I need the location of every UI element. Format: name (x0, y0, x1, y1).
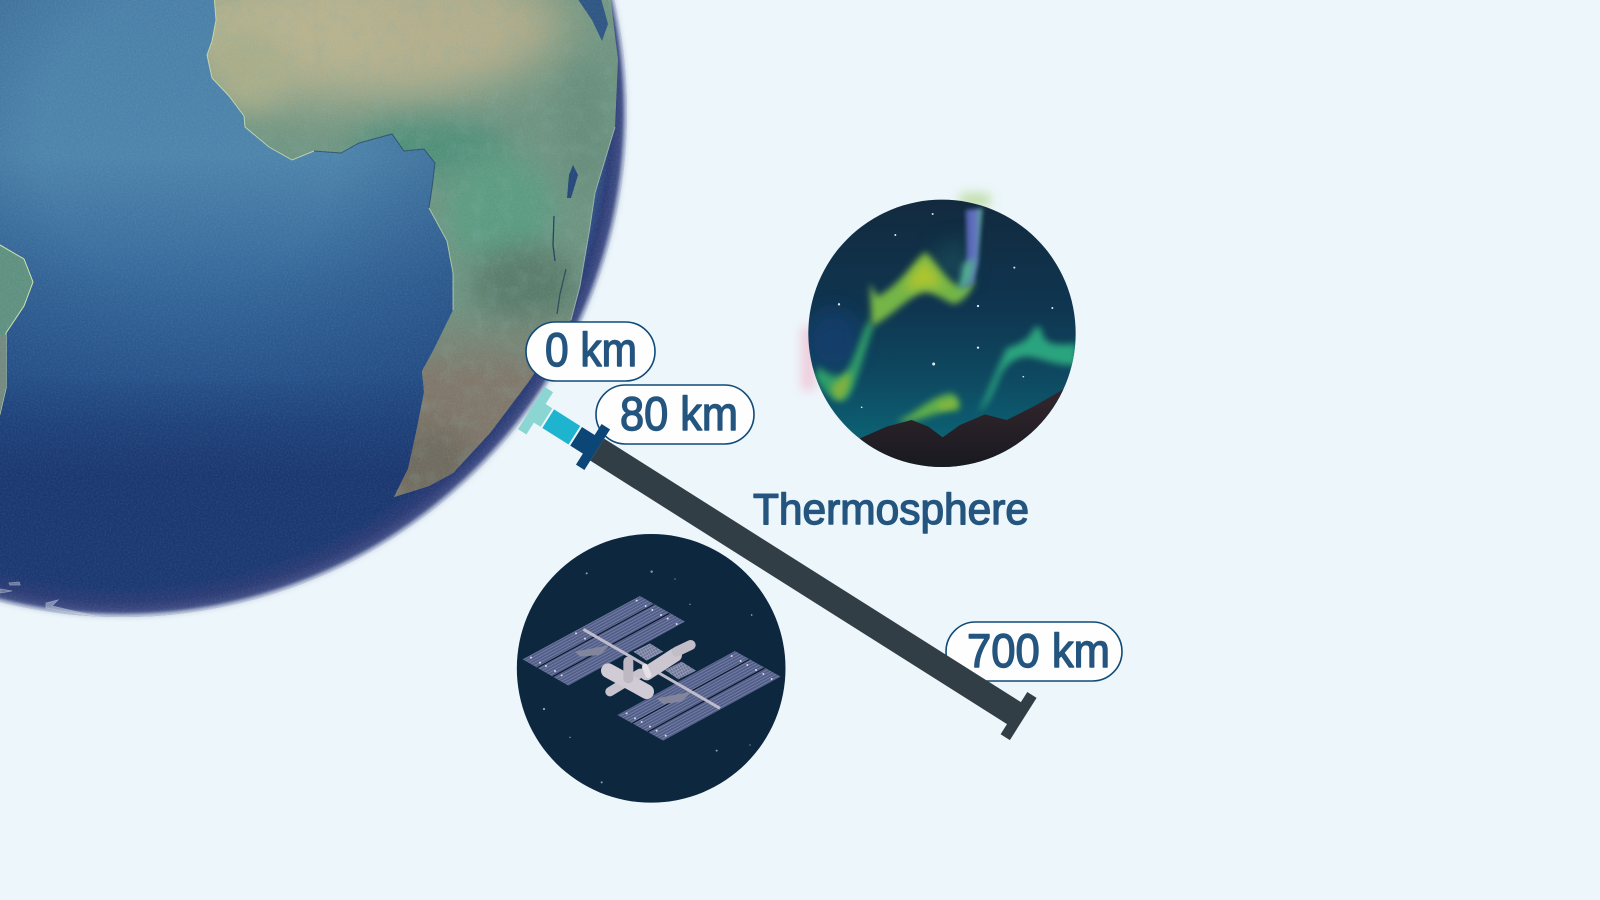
africa (206, 0, 618, 497)
night sky (808, 200, 1076, 467)
bleed: green top (960, 193, 990, 207)
solar array upper (523, 596, 685, 686)
altitude scale bar (518, 387, 1037, 740)
ocean (0, 0, 650, 630)
globe surface (0, 0, 650, 630)
stars (838, 213, 1053, 408)
surface grain (0, 0, 630, 625)
space background (517, 534, 785, 803)
station (523, 596, 781, 741)
lake victoria (567, 165, 578, 198)
truss (583, 629, 720, 708)
lake malawi (557, 269, 566, 314)
aurora circle (802, 193, 1080, 473)
small radiators (633, 643, 663, 661)
atmosphere glow (0, 0, 627, 617)
red sea (578, 0, 608, 41)
bleed: pink edge (802, 327, 815, 390)
segment: teal (518, 387, 560, 439)
south america (0, 243, 33, 414)
solar array lower (617, 651, 781, 741)
modules (608, 645, 691, 692)
aurora ribbon right (978, 327, 1077, 412)
aurora ribbon low (897, 393, 959, 423)
label: 700 km: 700 km (967, 624, 1110, 677)
grey wings (575, 645, 610, 657)
earth globe (0, 0, 650, 630)
stars (543, 570, 752, 783)
lake tanganyika (553, 216, 555, 261)
segment: thermosphere bar with 700 km tick (584, 429, 1037, 740)
segment: dark blue with 80 km tick (563, 416, 610, 470)
antarctica fragments (0, 582, 95, 616)
space station circle (517, 534, 785, 803)
label: 0 km: 0 km (545, 323, 637, 376)
heading: Thermosphere: Thermosphere (753, 485, 1029, 534)
label: 80 km: 80 km (620, 387, 738, 440)
segment: cyan (542, 409, 580, 445)
southern desert base (394, 322, 537, 497)
rim fade (0, 0, 628, 618)
aurora ribbon main (815, 208, 1077, 423)
mountains (860, 389, 1064, 467)
limb shading (0, 0, 627, 617)
